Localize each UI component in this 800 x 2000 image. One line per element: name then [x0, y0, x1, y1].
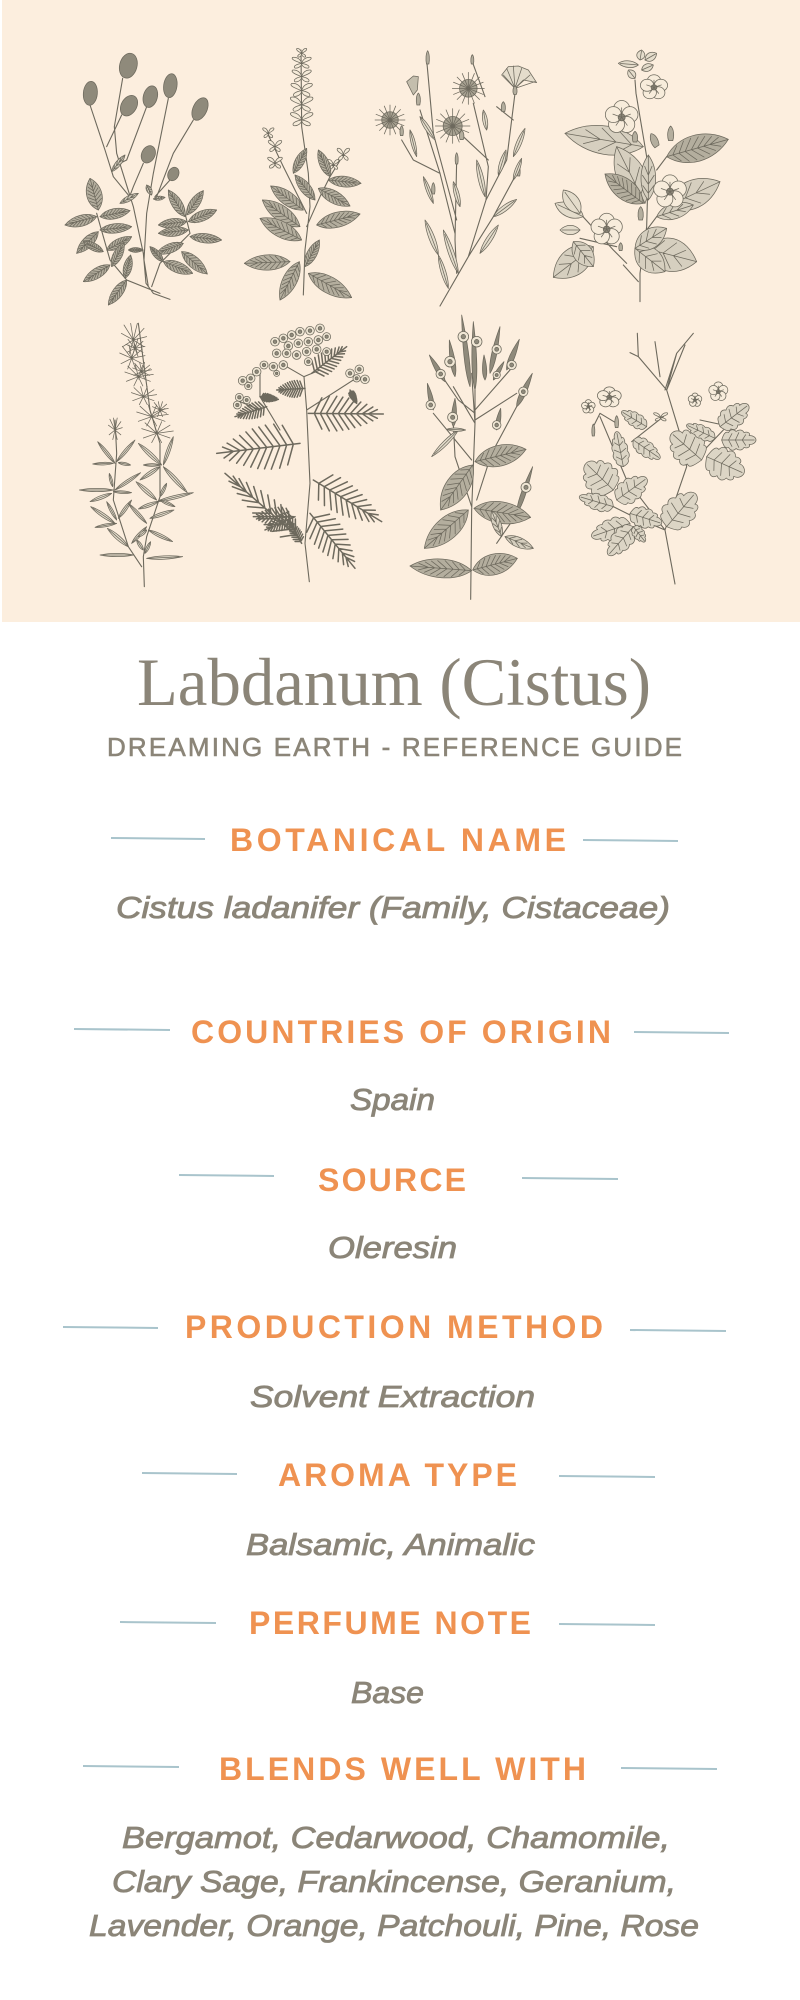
subtitle: DREAMING EARTH - REFERENCE GUIDE [107, 732, 682, 762]
heading: aroma type: AROMA TYPE [278, 1457, 517, 1493]
section: blends well with [83, 1751, 717, 1943]
panel: botanical illustration header [2, 0, 800, 622]
section: botanical name [111, 822, 678, 925]
section: source [179, 1162, 618, 1265]
section: countries of origin [74, 1014, 729, 1117]
value: blends well with: Lavender, Orange, Patchouli, Pine, Rose [89, 1908, 699, 1943]
value: production method: Solvent Extraction [250, 1379, 535, 1414]
illustration: cornflower plant [375, 51, 537, 306]
value: countries of origin: Spain [350, 1082, 435, 1117]
heading: blends well with: BLENDS WELL WITH [219, 1751, 586, 1787]
value: blends well with [89, 1820, 699, 1943]
value: source: Oleresin [328, 1230, 457, 1265]
illustration: burnet plant with oval seed heads [64, 51, 222, 308]
heading: production method: PRODUCTION METHOD [185, 1309, 603, 1345]
illustration: yarrow plant with feathery leaves [214, 324, 390, 582]
heading: botanical name: BOTANICAL NAME [230, 822, 566, 858]
value: blends well with: Clary Sage, Frankincense, Geranium, [112, 1864, 676, 1899]
heading: source: SOURCE [318, 1162, 466, 1198]
heading: perfume note: PERFUME NOTE [249, 1605, 531, 1641]
illustration: hyssop plant with needle leaves [79, 323, 194, 587]
value: aroma type: Balsamic, Animalic [246, 1527, 536, 1562]
illustration: sage plant with flower spike [244, 48, 362, 305]
illustration: vervain plant with thin spikes [409, 315, 535, 599]
section: perfume note [120, 1605, 655, 1710]
value: botanical name: Cistus ladanifer (Family, Cistaceae) [116, 890, 670, 925]
illustration: celandine plant with lobed leaves [574, 333, 756, 584]
section: production method [63, 1309, 726, 1414]
title: Labdanum (Cistus) [137, 644, 651, 720]
value: perfume note: Base [351, 1675, 424, 1710]
value: blends well with: Bergamot, Cedarwood, Chamomile, [122, 1820, 670, 1855]
heading: countries of origin: COUNTRIES OF ORIGIN [191, 1014, 611, 1050]
section: aroma type [142, 1457, 655, 1562]
illustration: mallow plant with open flowers [545, 49, 732, 302]
